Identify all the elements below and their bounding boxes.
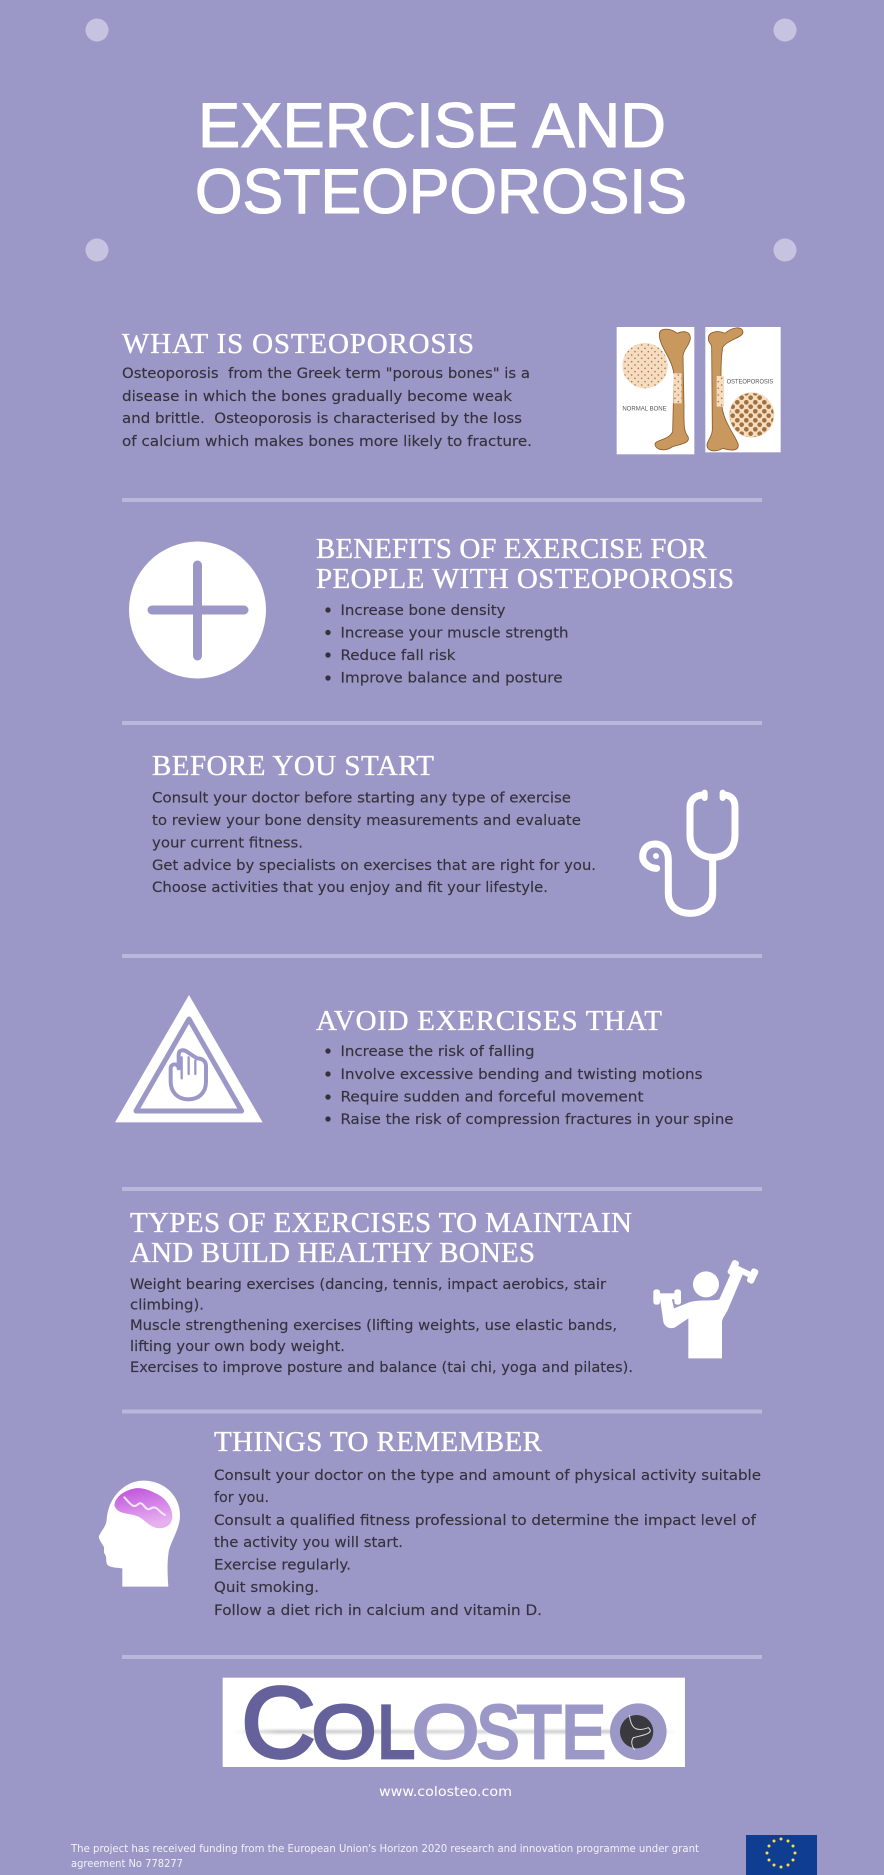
footer text <box>70 1843 699 1870</box>
logo: Colosteo: O <box>312 1690 376 1773</box>
corner dots <box>86 18 796 262</box>
text: before you start <box>152 790 596 896</box>
text: remember: Exercise regularly. <box>214 1556 351 1574</box>
heading: benefits: BENEFITS OF EXERCISE FOR <box>316 533 708 565</box>
text: types: climbing). <box>130 1296 204 1314</box>
panel: things to remember <box>99 1426 761 1619</box>
icon: EU flag <box>746 1835 817 1875</box>
logo: Colosteo: E <box>562 1690 606 1773</box>
website: www.colosteo.com <box>379 1784 512 1800</box>
footer text: agreement No 778277 <box>71 1858 183 1870</box>
list: avoid: Involve excessive bending and twisting motions <box>340 1066 702 1083</box>
icon: warning hand <box>115 995 263 1122</box>
heading: remember: THINGS TO REMEMBER <box>214 1426 543 1458</box>
panel: what is osteoporosis <box>122 327 781 454</box>
heading: before you start: BEFORE YOU START <box>152 750 434 782</box>
logo: Colosteo: T <box>517 1690 562 1773</box>
heading: types: AND BUILD HEALTHY BONES <box>130 1237 535 1269</box>
list: avoid: Raise the risk of compression fractures in your spine <box>340 1111 734 1128</box>
list: benefits: Reduce fall risk <box>340 647 456 664</box>
text: before you start: Consult your doctor before starting any type of exercise <box>152 790 571 806</box>
text: before you start: Choose activities that you enjoy and fit your lifestyle. <box>152 879 548 896</box>
list: benefits: Increase your muscle strength <box>340 624 568 642</box>
list: benefits: Improve balance and posture <box>340 670 563 686</box>
icon: bones <box>617 327 781 454</box>
text: remember: Follow a diet rich in calcium and vitamin D. <box>214 1602 542 1619</box>
icon: plus circle <box>129 542 266 678</box>
text: remember: for you. <box>214 1489 269 1506</box>
panel: avoid exercises <box>115 995 734 1128</box>
list: benefits: Increase bone density <box>340 602 506 619</box>
text: remember: the activity you will start. <box>214 1534 403 1551</box>
list: benefits <box>325 602 568 686</box>
text: types <box>130 1276 633 1376</box>
text: remember: Quit smoking. <box>214 1579 319 1596</box>
heading: benefits: PEOPLE WITH OSTEOPOROSIS <box>316 563 734 595</box>
title <box>195 91 687 227</box>
panel: types of exercises <box>130 1207 759 1376</box>
icon: weightlifter <box>653 1259 759 1358</box>
list: avoid: Increase the risk of falling <box>340 1043 534 1060</box>
heading: benefits <box>316 533 734 595</box>
text: definition: disease in which the bones gradually become weak <box>122 388 513 405</box>
heading: avoid: AVOID EXERCISES THAT <box>316 1005 662 1037</box>
list: avoid: Require sudden and forceful movement <box>340 1088 644 1106</box>
text: definition: and brittle. Osteoporosis is characterised by the loss <box>122 410 522 427</box>
icon: head with brain <box>99 1481 180 1587</box>
icon: bones: NORMAL BONE <box>622 406 667 413</box>
list: avoid <box>325 1043 734 1128</box>
text: definition: of calcium which makes bones more likely to fracture. <box>122 433 532 450</box>
heading: types <box>130 1207 632 1269</box>
logo: Colosteo: S <box>477 1690 519 1773</box>
logo: Colosteo: C <box>241 1667 315 1779</box>
icon: bones: OSTEOPOROSIS <box>727 378 774 385</box>
text: types: Exercises to improve posture and balance (tai chi, yoga and pilates). <box>130 1359 633 1376</box>
heading: what is osteoporosis: WHAT IS OSTEOPOROSIS <box>122 328 474 360</box>
logo: Colosteo: O <box>412 1690 479 1773</box>
text: before you start: your current fitness. <box>152 834 303 852</box>
text: before you start: to review your bone density measurements and evaluate <box>152 812 581 829</box>
footer text: The project has received funding from the European Union's Horizon 2020 research and innovation programme under grant <box>70 1843 699 1855</box>
panel: benefits <box>129 533 734 686</box>
text: definition: Osteoporosis from the Greek term "porous bones" is a <box>122 365 530 382</box>
heading: types: TYPES OF EXERCISES TO MAINTAIN <box>130 1207 632 1239</box>
text: types: lifting your own body weight. <box>130 1338 345 1355</box>
text: types: Muscle strengthening exercises (lifting weights, use elastic bands, <box>130 1317 617 1334</box>
logo: Colosteo <box>223 1667 685 1779</box>
text: remember: Consult a qualified fitness professional to determine the impact level of <box>214 1512 757 1529</box>
title: OSTEOPOROSIS <box>195 157 687 227</box>
text: before you start: Get advice by specialists on exercises that are right for you. <box>152 857 596 874</box>
text: definition <box>122 365 532 450</box>
text: remember: Consult your doctor on the type and amount of physical activity suitable <box>214 1467 761 1484</box>
icon: stethoscope <box>643 793 735 913</box>
text: types: Weight bearing exercises (dancing, tennis, impact aerobics, stair <box>130 1276 606 1293</box>
text: remember <box>214 1467 761 1619</box>
panel: before you start <box>152 750 735 913</box>
title: EXERCISE AND <box>198 91 666 161</box>
logo: Colosteo: L <box>377 1690 415 1773</box>
